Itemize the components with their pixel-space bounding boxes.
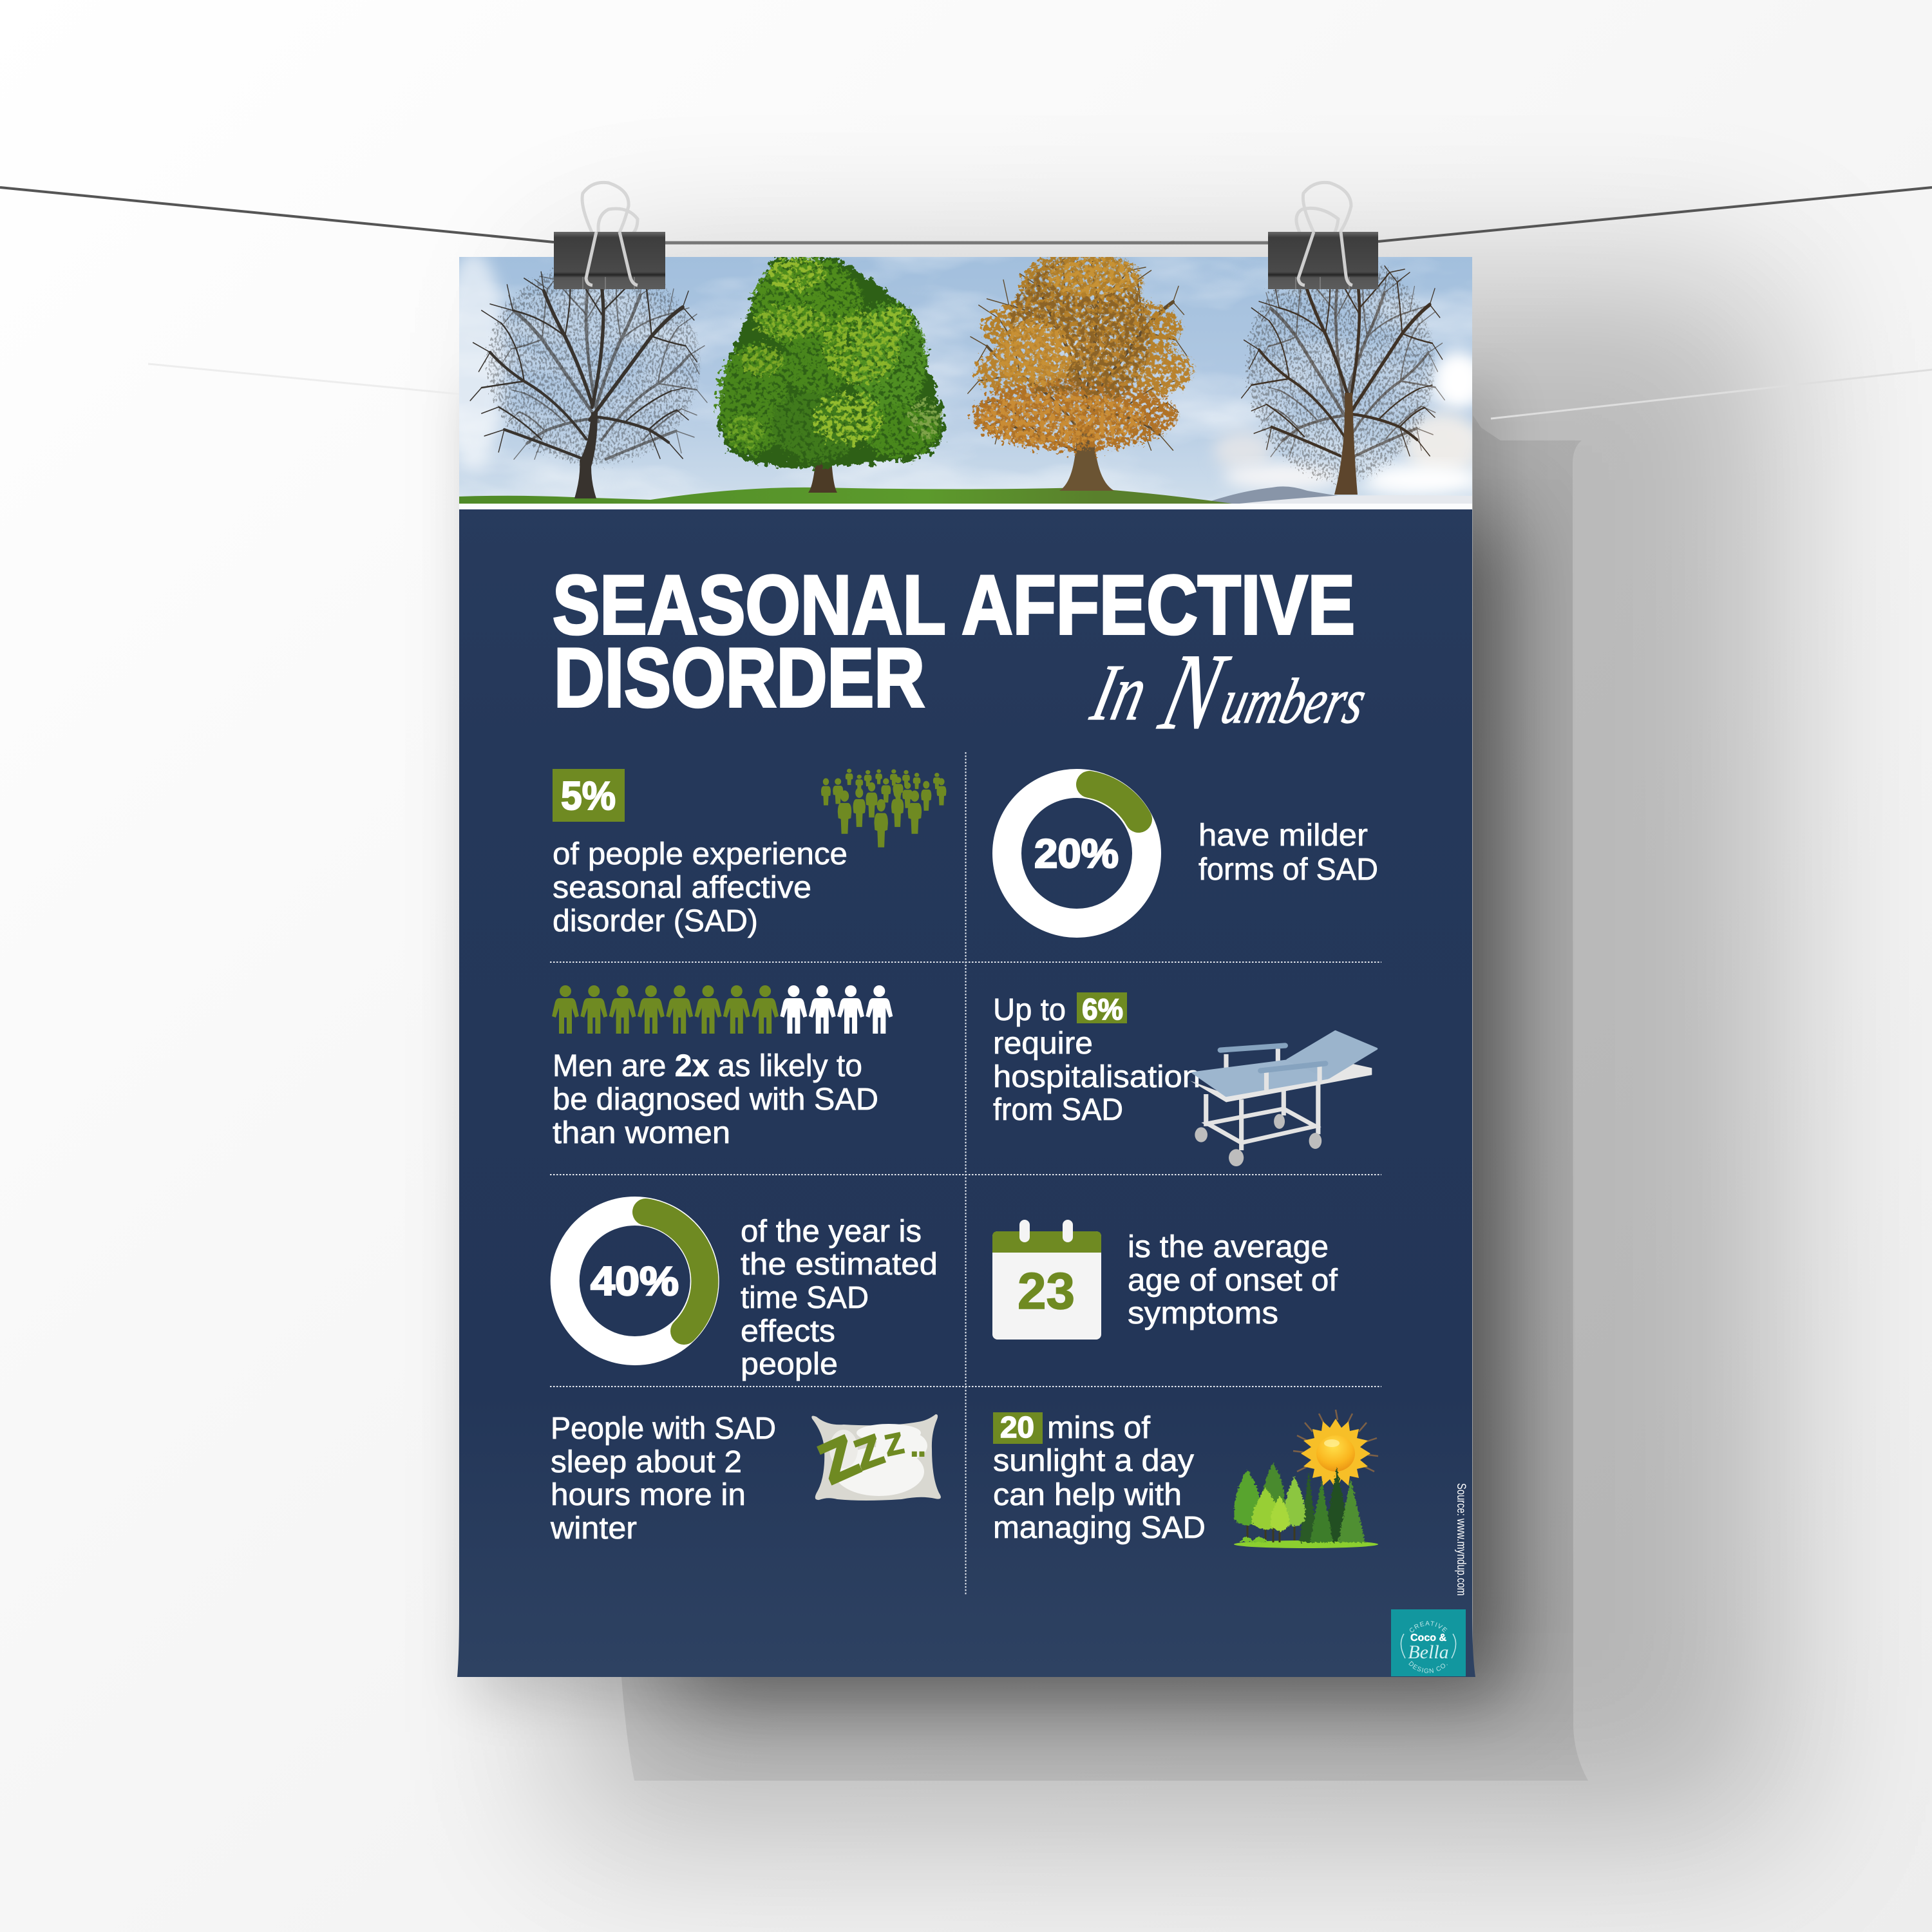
subtitle script: N bbox=[1150, 630, 1239, 752]
text: hospitalisation bbox=[993, 1060, 1200, 1094]
icon: pillow: Z bbox=[882, 1426, 907, 1463]
binder clip left bbox=[554, 182, 665, 289]
panel: sunlight: 20 bbox=[1000, 1410, 1034, 1444]
panel: 20% donut bbox=[1007, 783, 1378, 923]
wall shadow of poster bbox=[470, 277, 1777, 1835]
text: of people experience bbox=[553, 837, 848, 871]
tree: summer bbox=[718, 257, 944, 493]
panel: hospitalisation: 6% bbox=[1082, 992, 1123, 1026]
text: mins of bbox=[1047, 1411, 1151, 1445]
icon row: 12 people bbox=[552, 985, 893, 1034]
text: seasonal affective bbox=[553, 871, 811, 905]
icon: calendar bbox=[992, 1220, 1101, 1340]
clip handles bbox=[582, 182, 638, 235]
text bbox=[553, 1049, 878, 1150]
subtitle script: umbers bbox=[1215, 666, 1373, 737]
text: age of onset of bbox=[1128, 1264, 1338, 1298]
icon: crowd bbox=[821, 769, 946, 848]
wire reflections bbox=[148, 364, 1932, 419]
text: people bbox=[741, 1347, 838, 1381]
text bbox=[1198, 819, 1378, 887]
text bbox=[550, 1412, 776, 1546]
ground bbox=[459, 488, 1472, 504]
5% badge bbox=[553, 769, 625, 822]
panel: 5% of people bbox=[553, 769, 946, 938]
title: DISORDER bbox=[554, 630, 925, 724]
subtitle script: In bbox=[1083, 649, 1156, 737]
tree: winter bbox=[470, 264, 707, 498]
logo: Coco & Bella: Bella bbox=[1408, 1642, 1449, 1663]
text bbox=[553, 837, 848, 938]
text: Men are 2x as likely to bbox=[553, 1049, 862, 1083]
6% badge bbox=[1077, 992, 1127, 1023]
panel: 5% of people: 5% bbox=[561, 774, 616, 819]
text: Up to bbox=[993, 993, 1066, 1027]
text: time SAD bbox=[741, 1281, 869, 1315]
text: have milder bbox=[1198, 819, 1368, 853]
text: is the average bbox=[1128, 1230, 1329, 1264]
text: symptoms bbox=[1128, 1296, 1278, 1331]
panel: sleep bbox=[550, 1412, 941, 1546]
distant hills bbox=[1211, 486, 1338, 504]
icon: forest bbox=[1234, 1463, 1378, 1548]
text: be diagnosed with SAD bbox=[553, 1083, 878, 1117]
text: hours more in bbox=[551, 1478, 746, 1512]
icon: hospital bed bbox=[1190, 1032, 1376, 1166]
text: sunlight a day bbox=[993, 1444, 1194, 1478]
icon: pillow: Z bbox=[848, 1425, 889, 1479]
sky bbox=[459, 257, 1472, 504]
source note: Source: www.myndup.com bbox=[1454, 1483, 1468, 1596]
icon: pillow bbox=[810, 1414, 941, 1501]
text: the estimated bbox=[741, 1247, 938, 1282]
title: SEASONAL AFFECTIVE bbox=[553, 558, 1355, 652]
panel: 40% donut: 40% bbox=[591, 1259, 679, 1304]
donut chart 40% bbox=[565, 1211, 705, 1351]
text bbox=[741, 1215, 938, 1381]
clip handles bbox=[1296, 182, 1351, 235]
icon: pillow: Z bbox=[810, 1423, 867, 1495]
text: winter bbox=[550, 1511, 637, 1546]
text bbox=[993, 993, 1200, 1127]
text: People with SAD bbox=[551, 1412, 776, 1446]
panel: hospitalisation bbox=[993, 992, 1376, 1166]
text: of the year is bbox=[741, 1215, 922, 1249]
text: managing SAD bbox=[993, 1511, 1206, 1545]
20 badge bbox=[993, 1412, 1043, 1444]
photo: four seasons trees bbox=[441, 251, 1484, 506]
tree: late winter bbox=[1242, 254, 1444, 495]
logo: Coco & Bella: Coco & bbox=[1410, 1633, 1446, 1643]
logo: Coco & Bella bbox=[1391, 1609, 1466, 1676]
title bbox=[553, 558, 1355, 724]
icon: pillow: .. bbox=[911, 1432, 925, 1462]
text bbox=[1128, 1230, 1338, 1331]
poster sheet bbox=[457, 257, 1475, 1677]
tree: autumn bbox=[968, 251, 1195, 491]
text bbox=[993, 1411, 1206, 1545]
text: from SAD bbox=[993, 1093, 1123, 1127]
icon: sun bbox=[1293, 1410, 1378, 1488]
panel: sunlight bbox=[993, 1410, 1378, 1548]
clouds bbox=[441, 251, 1484, 504]
logo: Coco & Bella: DESIGN CO. bbox=[1408, 1661, 1448, 1673]
panel: age of onset bbox=[992, 1220, 1338, 1340]
text: require bbox=[993, 1027, 1093, 1061]
panel: men vs women bbox=[552, 985, 893, 1150]
grid dividers bbox=[550, 752, 1381, 1596]
logo: Coco & Bella: CREATIVE bbox=[1409, 1621, 1448, 1633]
panel: 20% donut: 20% bbox=[1034, 831, 1119, 876]
text: forms of SAD bbox=[1198, 853, 1378, 887]
text: disorder (SAD) bbox=[553, 904, 758, 938]
text: effects bbox=[741, 1314, 835, 1349]
binder clip right bbox=[1268, 182, 1378, 289]
text: than women bbox=[553, 1116, 730, 1150]
panel: 40% donut bbox=[565, 1211, 938, 1381]
white strip bbox=[459, 504, 1472, 509]
hanging wire bbox=[0, 187, 1932, 243]
text: sleep about 2 bbox=[551, 1445, 742, 1479]
text: can help with bbox=[993, 1478, 1182, 1512]
donut chart 20% bbox=[1007, 783, 1146, 923]
icon: calendar: 23 bbox=[1018, 1262, 1075, 1320]
